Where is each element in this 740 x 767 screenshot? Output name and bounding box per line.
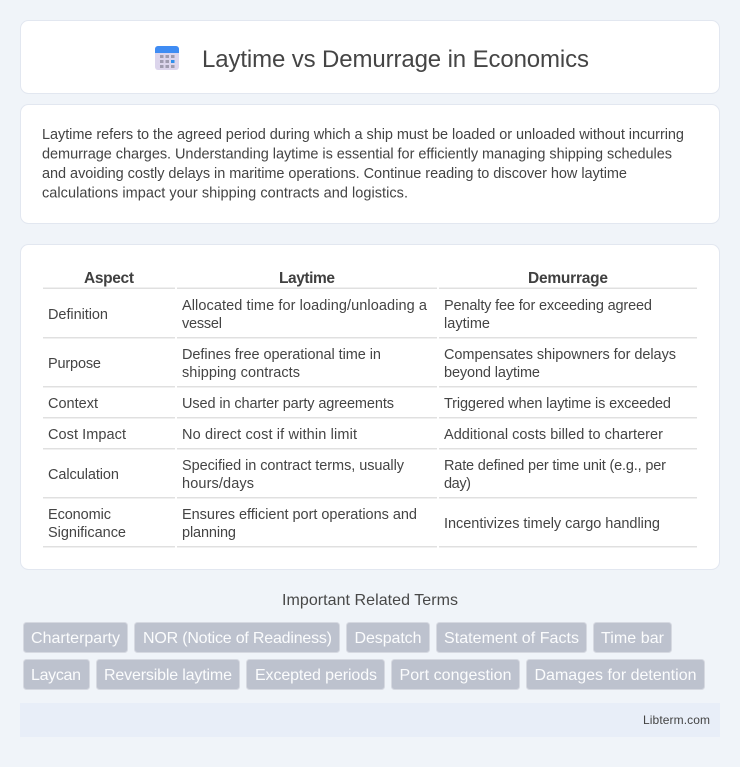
table row: Economic Significance: Ensures efficient port operations and (182, 507, 417, 523)
tag: Charterparty (24, 622, 128, 652)
tag: Damages for detention (526, 660, 704, 690)
table row: Calculation: day) (444, 476, 471, 492)
table row: Economic Significance: Incentivizes timely cargo handling (444, 516, 660, 532)
intro paragraph: demurrage charges. Understanding laytime is essential for efficiently managing shipping schedules (42, 146, 672, 162)
table row: Calculation: Calculation (48, 467, 119, 483)
tag: Time bar (594, 622, 672, 652)
table row: Definition: laytime (444, 316, 490, 332)
intro paragraph (42, 127, 684, 202)
tag: Laycan (24, 660, 90, 690)
table row: Cost Impact: Cost Impact (48, 427, 126, 443)
tag: Damages for detention: Damages for detention (534, 667, 696, 684)
table row: Purpose: shipping contracts (182, 365, 300, 381)
table row: Context: Context (48, 396, 98, 412)
panel: header card (20, 20, 720, 94)
intro paragraph: calculations impact your shipping contracts and logistics. (42, 186, 408, 202)
tag: Excepted periods (246, 660, 384, 690)
footer credit: Libterm.com (643, 713, 710, 727)
table row: Purpose: Compensates shipowners for delays (444, 347, 676, 363)
tag: Statement of Facts (436, 622, 586, 652)
table row: Definition: Penalty fee for exceeding agreed (444, 298, 652, 314)
tag: NOR: NOR (Notice of Readiness) (143, 630, 332, 647)
icon: calendar (155, 46, 179, 70)
panel: intro text card (20, 104, 720, 224)
table row: Economic Significance: planning (182, 525, 236, 541)
table row: Definition: vessel (182, 316, 222, 332)
table row: Context: Used in charter party agreements (182, 396, 394, 412)
table row: Purpose: beyond laytime (444, 365, 540, 381)
tag: Reversible laytime (96, 660, 240, 690)
table header row: Laytime (279, 270, 335, 287)
footer bar (20, 703, 720, 737)
table row: Context (43, 396, 697, 418)
tag: Laycan: Laycan (31, 667, 81, 684)
tag: Port congestion: Port congestion (400, 667, 512, 684)
tag: Despatch (346, 622, 430, 652)
table header row: Aspect (84, 270, 134, 287)
intro paragraph: and avoiding costly delays in maritime operations. Continue reading to discover how laytime (42, 166, 627, 182)
table row: Purpose (43, 347, 697, 388)
title: Laytime vs Demurrage in Economics (202, 46, 589, 73)
tag: Reversible laytime: Reversible laytime (104, 667, 232, 684)
table row: Calculation: Specified in contract terms, usually (182, 458, 405, 474)
table row: Economic Significance: Economic (48, 507, 111, 523)
tag: Despatch: Despatch (354, 630, 422, 647)
table row: Definition: Definition (48, 307, 108, 323)
table header row (43, 270, 697, 289)
table row: Economic Significance (43, 507, 697, 548)
table row: Purpose: Purpose (48, 356, 101, 372)
table row: Cost Impact: No direct cost if within limit (182, 427, 357, 443)
tag: Excepted periods: Excepted periods (255, 667, 377, 684)
table row: Definition (43, 298, 697, 338)
table row: Calculation: hours/days (182, 476, 254, 492)
table row: Calculation: Rate defined per time unit (e.g., per (444, 458, 666, 474)
tag: Port congestion (392, 660, 520, 690)
tag: Charterparty: Charterparty (31, 630, 120, 647)
panel: related term tags (24, 622, 704, 690)
table row: Context: Triggered when laytime is exceeded (444, 396, 671, 412)
table row: Calculation (43, 458, 697, 498)
table row: Purpose: Defines free operational time in (182, 347, 381, 363)
heading: Important Related Terms: Important Related Terms (282, 592, 458, 609)
table header row: Demurrage (528, 270, 608, 287)
table row: Cost Impact (43, 427, 697, 450)
panel: comparison table card (20, 244, 720, 570)
tag: NOR (134, 622, 340, 652)
table row: Economic Significance: Significance (48, 525, 126, 541)
intro paragraph: Laytime refers to the agreed period during which a ship must be loaded or unloaded without incurring (42, 127, 684, 143)
table row: Cost Impact: Additional costs billed to charterer (444, 427, 663, 443)
table row: Definition: Allocated time for loading/unloading a (182, 298, 428, 314)
tag: Time bar: Time bar (601, 630, 665, 647)
tag: Statement of Facts: Statement of Facts (444, 630, 579, 647)
